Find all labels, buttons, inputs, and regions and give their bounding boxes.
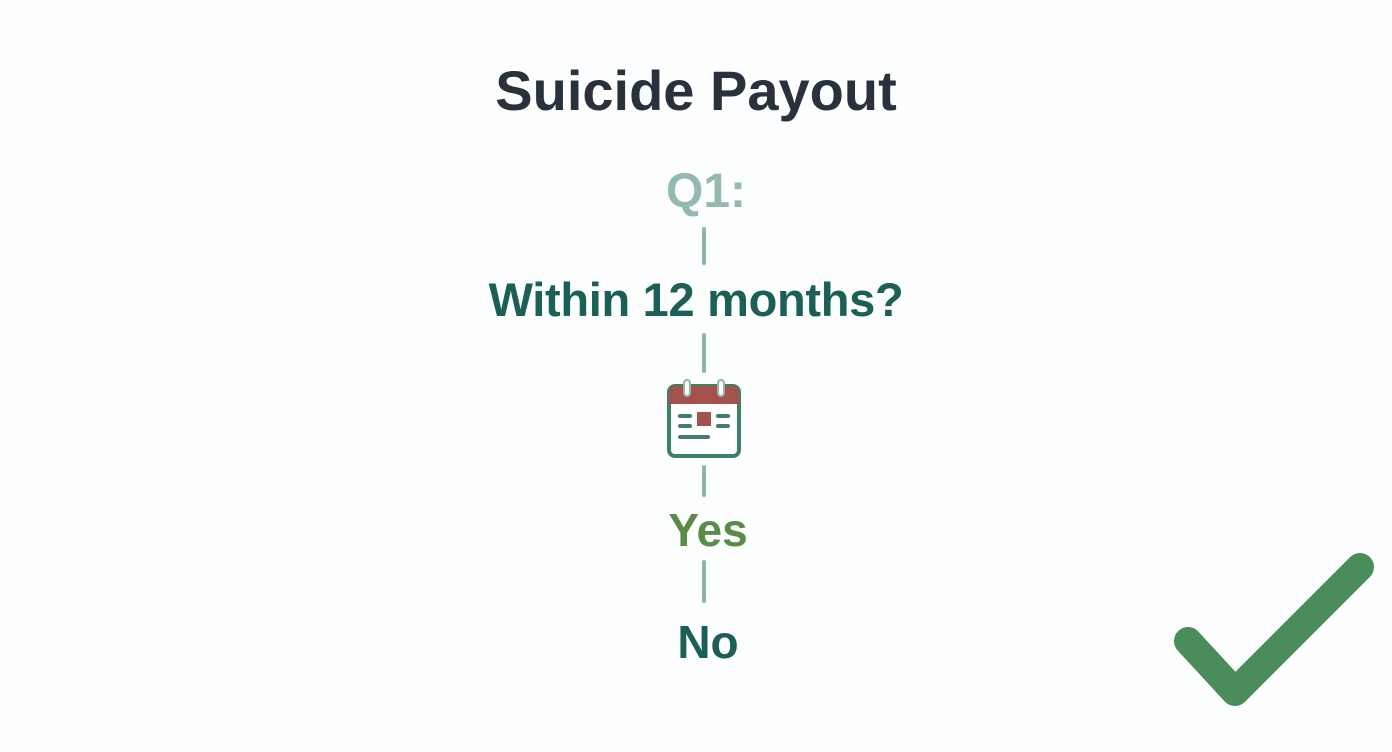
connector line 2	[702, 333, 706, 373]
connector line 3	[702, 465, 706, 497]
question label: Q1:	[666, 165, 746, 218]
icon: checkmark	[1174, 553, 1374, 706]
connector line 1	[702, 227, 706, 265]
icon: calendar	[667, 379, 741, 458]
answer: yes: Yes	[668, 504, 748, 556]
title: Suicide Payout	[495, 59, 897, 122]
question text: Within 12 months?	[489, 273, 903, 326]
answer: no: No	[677, 616, 739, 668]
connector line 4	[702, 560, 706, 603]
